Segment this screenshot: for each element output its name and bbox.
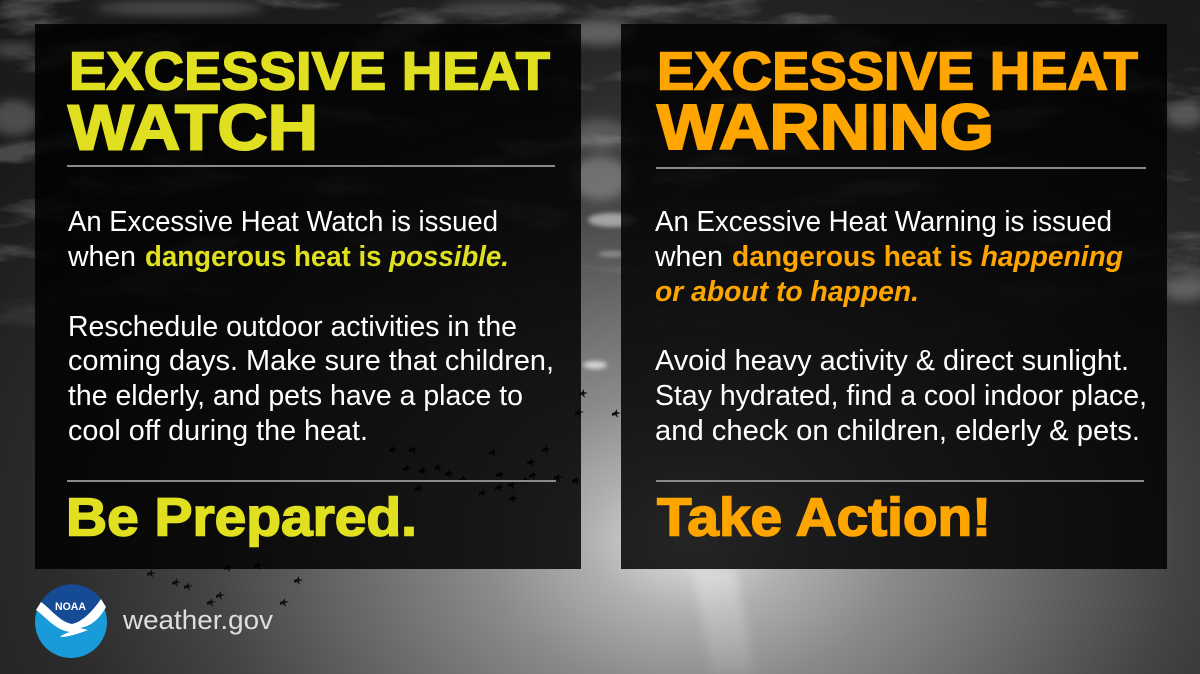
- callout: be prepared: Be Prepared.: [66, 488, 417, 548]
- heading: excessive heat watch: EXCESSIVE HEAT: [69, 42, 550, 102]
- text block: warning advice: Avoid heavy activity & direct sunlight.: [655, 345, 1129, 377]
- text block: watch definition: An Excessive Heat Watch is issued: [68, 206, 498, 238]
- panel: excessive heat warning: [621, 24, 1167, 569]
- text block: warning definition: An Excessive Heat Warning is issued: [655, 206, 1112, 238]
- text block: warning definition: dangerous heat is happening: [732, 241, 1127, 273]
- text block: watch advice: the elderly, and pets have a place to: [68, 380, 523, 412]
- text block: weather.gov: weather.gov: [122, 605, 274, 635]
- text block: warning definition: when: [654, 241, 723, 273]
- callout: take action: Take Action!: [657, 488, 991, 548]
- icon: flock of birds: [147, 389, 621, 607]
- heading: excessive heat watch: [68, 42, 550, 164]
- heading: excessive heat warning: EXCESSIVE HEAT: [657, 42, 1138, 102]
- heading: excessive heat warning: WARNING: [657, 91, 994, 163]
- text block: watch definition: when: [67, 241, 136, 273]
- panel: excessive heat watch: [35, 24, 581, 569]
- text block: watch advice: coming days. Make sure that children,: [68, 345, 554, 377]
- heading: excessive heat watch: WATCH: [68, 92, 318, 164]
- text block: warning advice: Stay hydrated, find a cool indoor place,: [655, 380, 1147, 412]
- text block: warning definition: or about to happen.: [655, 276, 919, 308]
- text block: watch advice: Reschedule outdoor activities in the: [68, 311, 517, 343]
- icon: NOAA logo: [35, 584, 107, 658]
- text block: watch advice: cool off during the heat.: [68, 415, 368, 447]
- heading: excessive heat warning: [657, 42, 1138, 163]
- text block: watch definition: dangerous heat is possible.: [145, 241, 515, 273]
- icon: NOAA logo: NOAA: [55, 601, 86, 613]
- text block: warning advice: and check on children, elderly & pets.: [655, 415, 1140, 447]
